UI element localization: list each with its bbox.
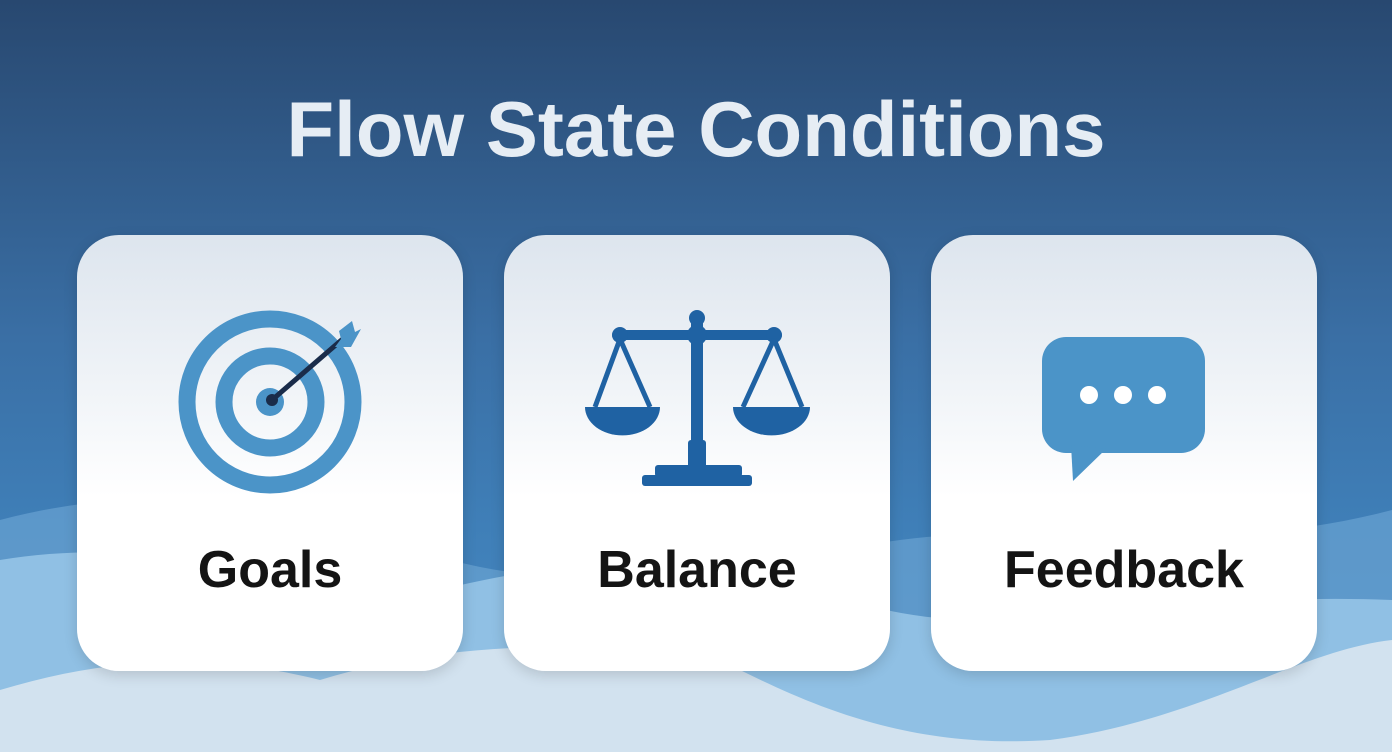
label: balance: Balance bbox=[597, 541, 797, 599]
icon: scale bbox=[585, 310, 810, 486]
panel: balance bbox=[504, 235, 890, 671]
panel: goals bbox=[77, 235, 463, 671]
icon: chat bubble bbox=[1042, 337, 1205, 481]
icon: target bbox=[178, 310, 362, 494]
label: feedback: Feedback bbox=[1004, 541, 1244, 599]
label: goals: Goals bbox=[198, 541, 342, 599]
panel: feedback bbox=[931, 235, 1317, 671]
title: Flow State Conditions bbox=[287, 85, 1105, 173]
